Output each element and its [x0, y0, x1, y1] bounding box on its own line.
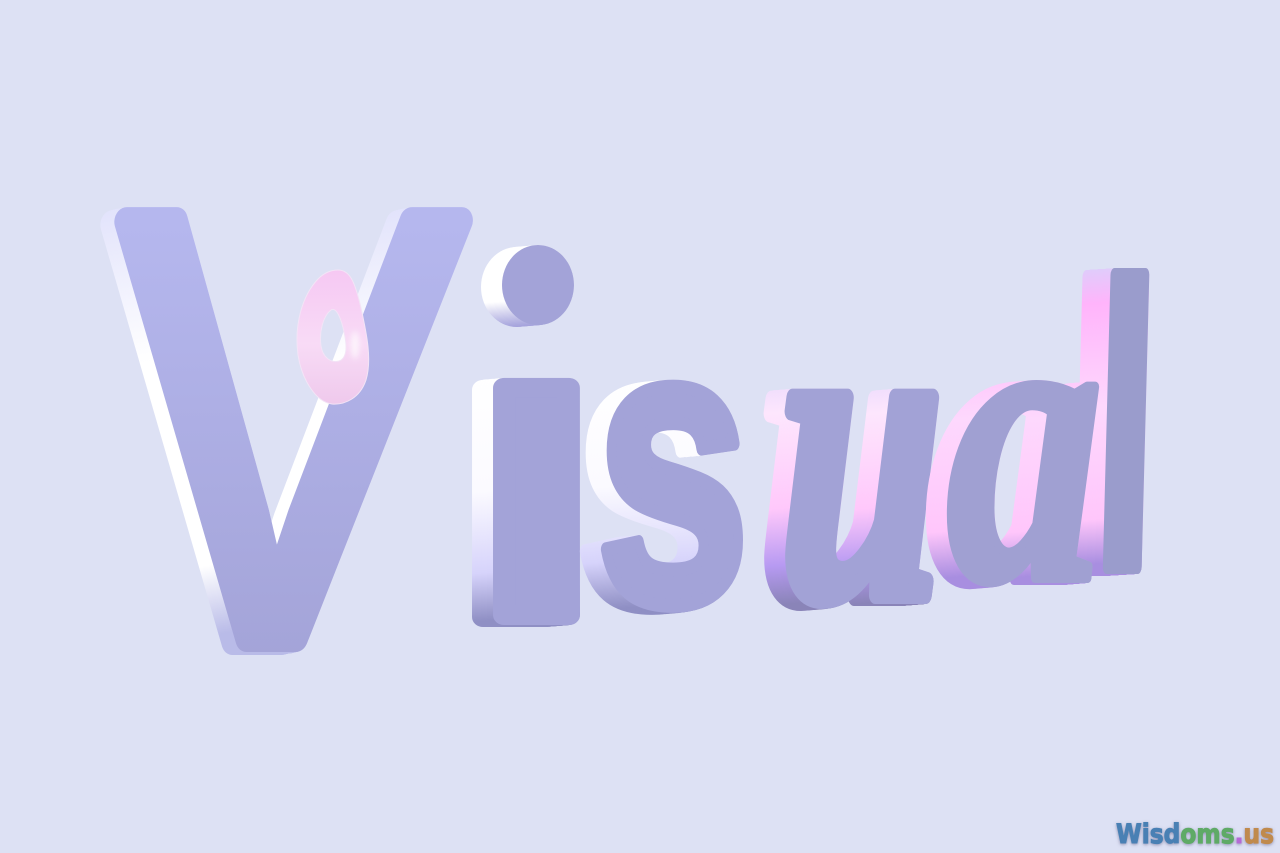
letter i with 3D extrusion: [472, 245, 580, 627]
letter a with 3D extrusion: a: [947, 213, 1103, 667]
letter u with 3D extrusion: u: [780, 211, 943, 689]
letter u with 3D extrusion: u: [780, 211, 943, 689]
icon: glossy pink droplet ring: [297, 270, 369, 404]
letter i with 3D extrusion: i: [471, 226, 602, 706]
watermark logo: Wisdoms.us: [1116, 819, 1274, 850]
letter i with 3D extrusion: i: [471, 226, 602, 706]
letter l with 3D extrusion (drawn behind the a): l: [1089, 203, 1163, 653]
letter a with 3D extrusion: a: [947, 213, 1103, 667]
letter l with 3D extrusion (drawn behind the a): l: [1089, 203, 1163, 653]
letter s with 3D extrusion: s: [596, 240, 750, 687]
letter V with 3D extrusion: V: [95, 89, 473, 767]
letter s with 3D extrusion: s: [596, 240, 750, 687]
letter V with 3D extrusion: V: [95, 89, 473, 767]
